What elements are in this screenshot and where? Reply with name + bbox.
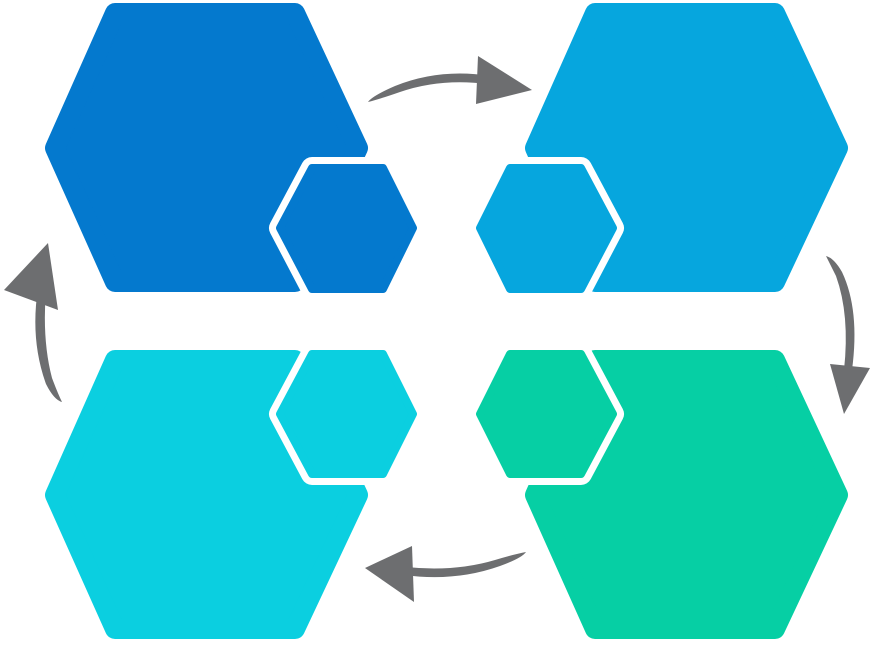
arrow: right (top to bottom): [826, 256, 870, 414]
arrow: bottom (right to left): [365, 546, 526, 602]
panel: top-left hexagon: [55, 13, 413, 289]
panel: top-right hexagon: [480, 13, 838, 289]
small hexagon bottom-right: [480, 354, 613, 474]
panel: bottom-right hexagon: [480, 354, 838, 629]
arrow: top (left to right): [368, 56, 532, 104]
small hexagon top-right: [480, 168, 613, 289]
small hexagon bottom-left: [280, 354, 413, 474]
panel: bottom-left hexagon: [55, 354, 413, 629]
arrow: left (bottom to top): [4, 243, 62, 402]
small hexagon top-left: [280, 168, 413, 289]
